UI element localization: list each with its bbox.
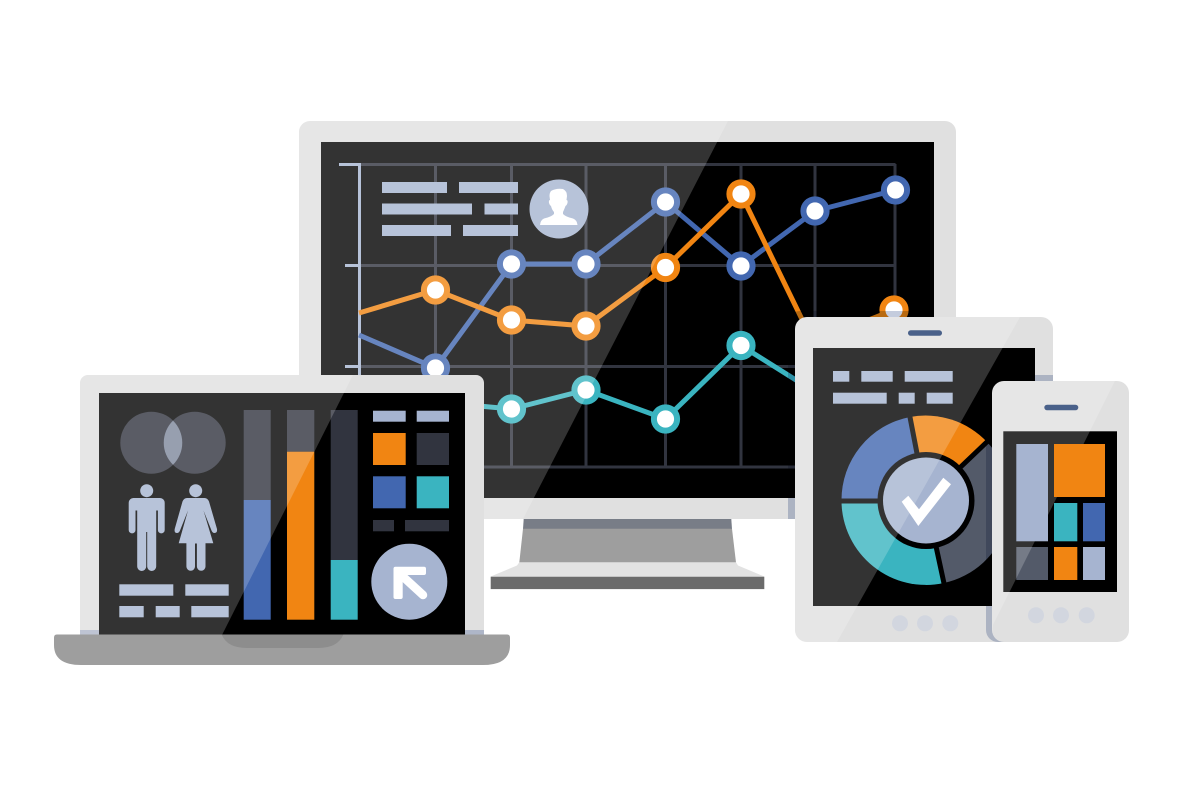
tile grid	[1016, 444, 1105, 580]
laptop screen	[99, 393, 465, 636]
monitor glare	[321, 142, 717, 498]
donut chart	[838, 412, 1010, 588]
tablet buttons	[892, 615, 958, 631]
tablet glare	[795, 317, 1002, 606]
phone shadow on tablet	[986, 375, 1053, 642]
series: teal line	[359, 334, 815, 431]
phone	[992, 381, 1129, 642]
text lines	[119, 584, 229, 617]
monitor stand	[491, 519, 764, 589]
illustration: devices showing dashboards	[54, 121, 1129, 665]
icon: arrow in circle	[371, 544, 447, 620]
icon: man	[129, 484, 165, 571]
icon: user avatar	[530, 180, 588, 238]
tablet speaker	[908, 330, 942, 336]
series: orange line	[359, 182, 906, 342]
text lines	[382, 182, 518, 236]
phone screen	[1003, 431, 1117, 592]
laptop base	[54, 634, 510, 665]
desktop monitor	[299, 121, 956, 589]
tablet shadow on monitor	[788, 311, 908, 519]
text lines	[833, 371, 953, 404]
laptop lid	[80, 375, 484, 636]
legend tiles	[373, 411, 449, 531]
chart axis	[339, 164, 360, 376]
phone glare	[992, 381, 1090, 592]
dark tile	[1016, 547, 1048, 580]
laptop	[54, 375, 510, 665]
icon: woman	[175, 484, 217, 571]
monitor bezel	[299, 121, 956, 519]
series: blue line	[359, 178, 907, 380]
hinge shadows	[80, 630, 484, 636]
tablet body	[795, 317, 1053, 642]
icon: check mark	[902, 478, 951, 526]
monitor screen	[321, 142, 934, 498]
chart grid	[359, 164, 896, 467]
bar chart	[244, 410, 358, 620]
venn diagram	[120, 412, 226, 474]
tablet screen	[813, 348, 1035, 606]
tablet	[795, 317, 1053, 642]
phone buttons	[1028, 607, 1095, 623]
laptop glare	[80, 393, 344, 634]
phone body	[992, 381, 1129, 642]
line chart	[339, 164, 907, 467]
phone speaker	[1044, 405, 1078, 410]
